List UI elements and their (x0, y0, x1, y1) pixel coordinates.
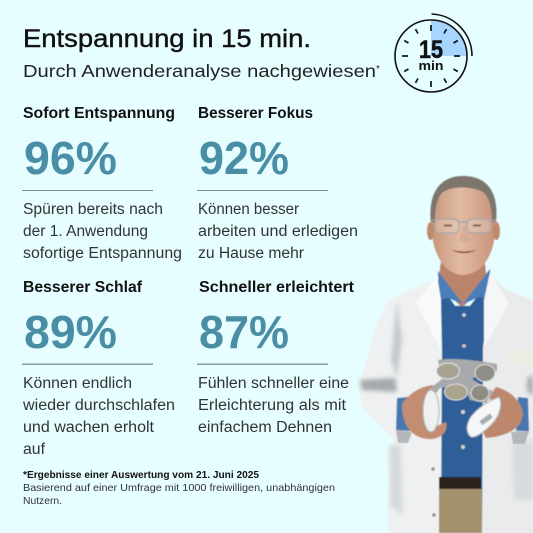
description: auf (23, 441, 46, 458)
heading: Schneller erleichtert (199, 279, 354, 296)
heading: Besserer Schlaf (23, 279, 143, 296)
description: und wachen erholt (23, 419, 155, 436)
left hand (402, 385, 447, 439)
footnote: *Ergebnisse einer Auswertung vom 21. Juni 2025 (23, 469, 259, 481)
hair (430, 176, 497, 222)
description: arbeiten und erledigen (198, 223, 358, 240)
neck (438, 255, 487, 308)
panel: Schneller erleichtert (197, 279, 354, 436)
stat: 87%: 87% (199, 306, 289, 358)
panel: Sofort Entspannung (22, 105, 182, 262)
shirt (437, 280, 490, 533)
face (432, 186, 495, 275)
belt (439, 477, 481, 489)
coat folds (360, 300, 533, 516)
subtitle: Durch Anwenderanalyse nachgewiesen (23, 61, 376, 81)
description: der 1. Anwendung (23, 223, 148, 240)
icon: 15 minute timer: 15 (419, 36, 443, 64)
eyes (444, 224, 481, 226)
stat: 89%: 89% (24, 306, 117, 358)
coat buttons (431, 467, 436, 517)
shirt buttons (461, 313, 466, 449)
shadow under cuffs (396, 430, 412, 443)
description: Erleichterung als mit (198, 397, 347, 414)
panel: Besserer Schlaf (22, 279, 175, 458)
icon: 15 minute timer (395, 14, 472, 92)
nose (459, 224, 470, 242)
heading: Besserer Fokus (198, 105, 313, 122)
description: Fühlen schneller eine (198, 375, 349, 392)
stat: 92%: 92% (199, 132, 289, 184)
description: einfachem Dehnen (198, 419, 332, 436)
name badge (508, 349, 533, 366)
coat (359, 278, 442, 533)
icon: 15 minute timer: min (418, 58, 444, 73)
description: wieder durchschlafen (22, 397, 175, 414)
title: Entspannung in 15 min. (23, 25, 311, 53)
description: sofortige Entspannung (23, 245, 182, 262)
device (423, 359, 501, 437)
description: zu Hause mehr (198, 245, 304, 262)
description: Können besser (198, 201, 299, 218)
stat: 96%: 96% (24, 132, 117, 184)
footnote: Nutzern. (23, 495, 62, 507)
description: Können endlich (23, 375, 132, 392)
head (427, 176, 500, 275)
mouth (452, 250, 476, 253)
panel: Besserer Fokus (197, 105, 358, 262)
lapels (416, 275, 442, 353)
doctor holding device (359, 176, 533, 533)
trousers (439, 489, 482, 533)
footnote: Basierend auf einer Umfrage mit 1000 freiwilligen, unabhängigen (23, 482, 335, 494)
right hand (483, 387, 523, 438)
shadow under right cuff (511, 431, 529, 444)
cuffs (396, 397, 410, 431)
heading: Sofort Entspannung (23, 105, 175, 122)
footnote (23, 469, 335, 507)
subtitle: * (376, 64, 380, 75)
description: Spüren bereits nach (23, 201, 163, 218)
glasses (432, 219, 495, 233)
